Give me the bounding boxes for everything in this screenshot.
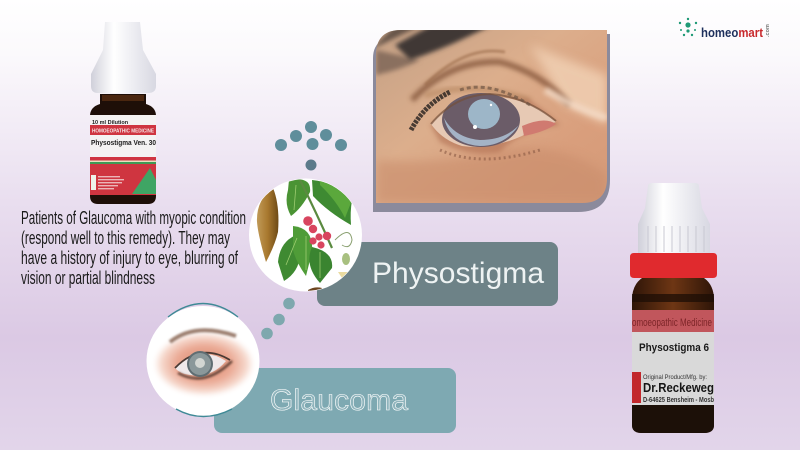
- right bottle: Physostigma 6: D-64625 Bensheim - Mosb: [643, 397, 714, 404]
- right bottle: Physostigma 6: [630, 183, 717, 433]
- bottle cap: [91, 22, 156, 93]
- dots: arrow between eye and plant: [261, 298, 295, 339]
- logo: homeomart: [679, 18, 771, 40]
- bottle cap: [638, 183, 710, 254]
- right bottle: Physostigma 6: omoeopathic Medicine: [632, 317, 712, 329]
- bottle base: [632, 405, 714, 433]
- right bottle: Physostigma 6: Physostigma 6: [639, 342, 709, 354]
- left bottle: Physostigma Ven. 30: HOMOEOPATHIC MEDICINE: [92, 128, 155, 134]
- eye photo with shadow: [370, 26, 610, 212]
- red ring: [630, 253, 717, 278]
- plant illustration: [249, 178, 362, 292]
- right bottle: Physostigma 6: Original Product/Mfg. by:: [643, 375, 707, 381]
- label: Glaucoma: [214, 368, 456, 433]
- plant root: [257, 188, 278, 262]
- photo: [370, 26, 607, 203]
- cataract: [468, 99, 500, 129]
- iris: [442, 93, 520, 147]
- left bottle: Physostigma Ven. 30: Physostigma Ven. 30: [91, 138, 156, 147]
- left bottle: Physostigma Ven. 30: [90, 22, 156, 204]
- plant leaves: [287, 179, 310, 216]
- bottle glass: [90, 94, 156, 204]
- eye white: [431, 96, 556, 147]
- label: Glaucoma: Glaucoma: [270, 384, 408, 417]
- right bottle: Physostigma 6: Dr.Reckeweg: [643, 381, 714, 395]
- label: Physostigma: [317, 242, 558, 306]
- logo wordmark: homeomart: [701, 25, 764, 40]
- label: Physostigma: Physostigma: [372, 257, 544, 290]
- logo suffix: .com: [765, 24, 771, 37]
- amber glass: [632, 278, 714, 433]
- dots: arrow above plant: [275, 121, 347, 170]
- left bottle: Physostigma Ven. 30: 10 ml Dilution: [92, 120, 129, 126]
- eye illustration: [146, 304, 260, 416]
- text block: remedy description: vision or partial blindness: [21, 268, 155, 288]
- text block: remedy description: Patients of Glaucoma with myopic condition: [21, 208, 246, 228]
- text block: remedy description: (respond well to this remedy). They may: [21, 228, 230, 248]
- bottle label: [90, 115, 156, 165]
- red label band: [632, 310, 714, 332]
- text block: remedy description: have a history of injury to eye, blurring of: [21, 248, 239, 268]
- icon: logo dots: [679, 18, 697, 36]
- plant berries: [303, 216, 331, 249]
- grey label: [632, 332, 714, 405]
- photo shadow: [373, 34, 610, 212]
- text block: remedy description: [21, 208, 246, 288]
